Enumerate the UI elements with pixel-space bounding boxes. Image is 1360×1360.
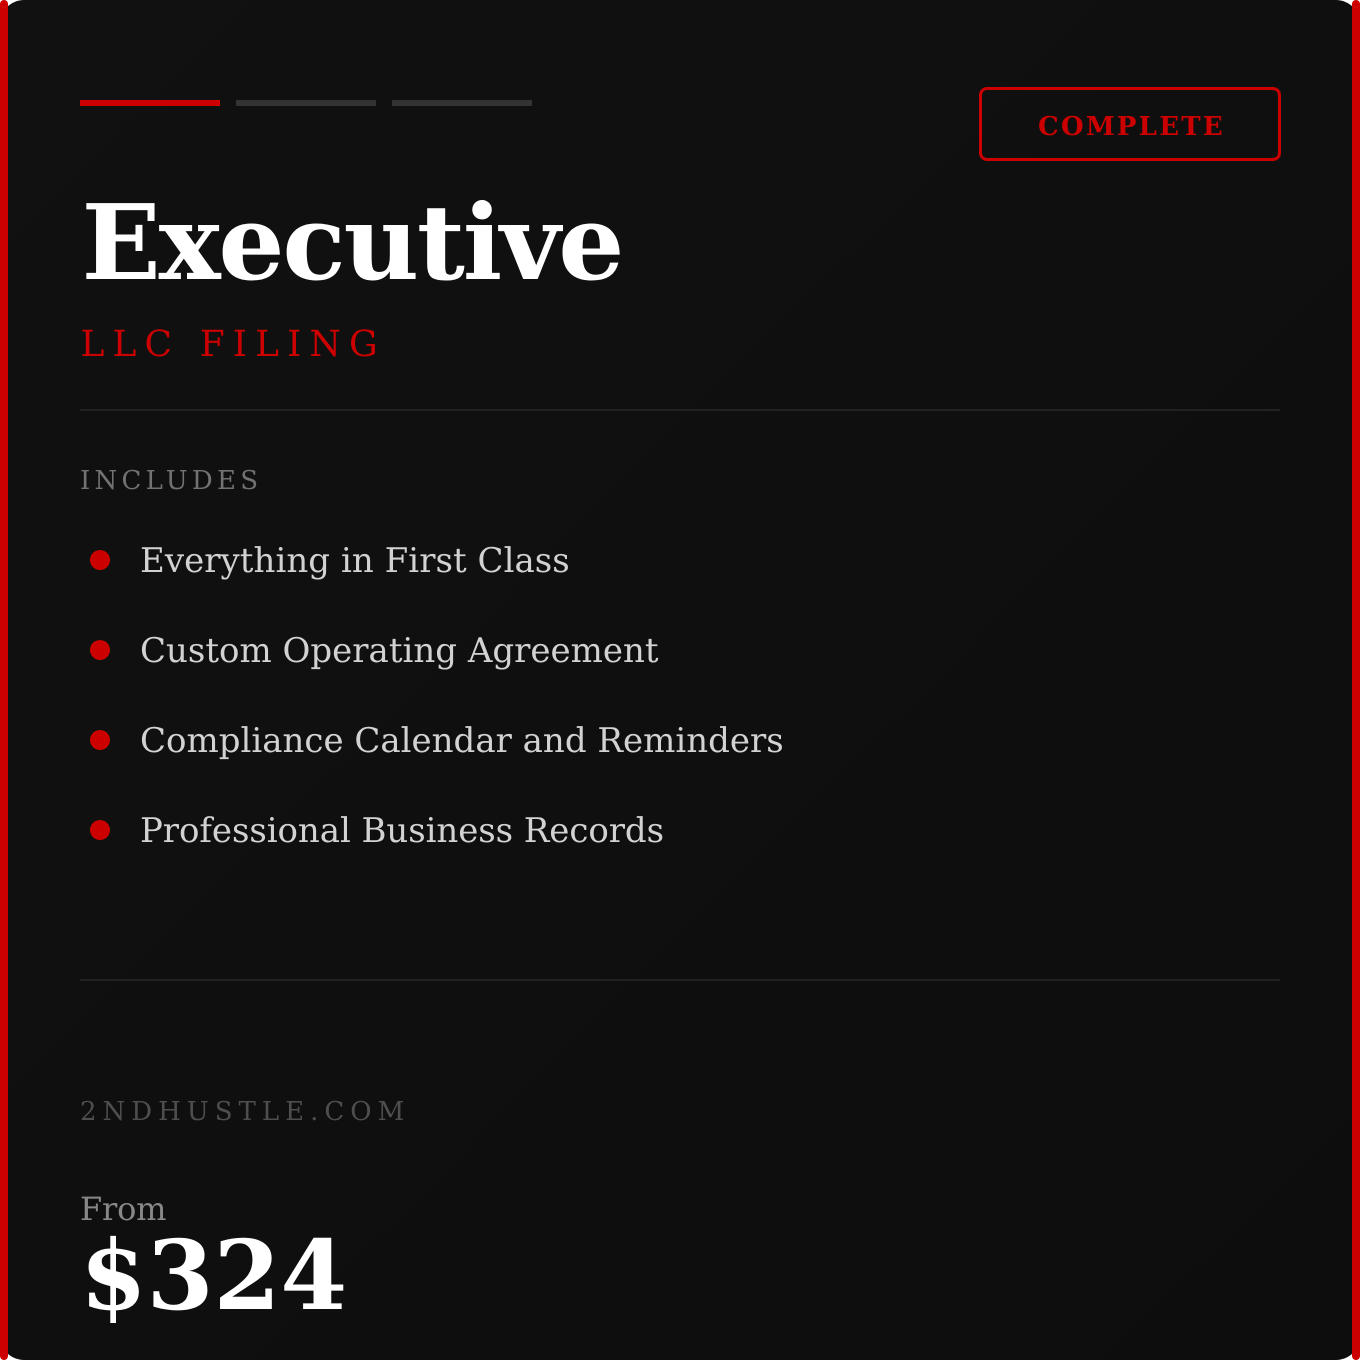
feature 3: Compliance Calendar and Reminders (140, 721, 784, 761)
price prefix: From (80, 1190, 166, 1228)
bullet 1 (90, 550, 110, 570)
feature 4: Professional Business Records (140, 811, 664, 851)
active segment (80, 100, 220, 106)
subtitle: LLC FILING (80, 324, 386, 365)
right accent bar (1352, 0, 1360, 1360)
feature 2: Custom Operating Agreement (140, 631, 659, 671)
includes heading: INCLUDES (80, 466, 262, 496)
feature list (90, 541, 784, 851)
website: 2NDHUSTLE.COM (80, 1097, 410, 1127)
inactive segment 2 (236, 100, 376, 106)
badge: complete (979, 87, 1281, 161)
inactive segment 3 (392, 100, 532, 106)
bullet 3 (90, 730, 110, 750)
badge label: COMPLETE (1038, 112, 1225, 142)
progress indicator (80, 100, 532, 106)
title: Executive (82, 181, 622, 304)
price: $324 (80, 1219, 347, 1332)
left accent bar (0, 0, 8, 1360)
feature 1: Everything in First Class (140, 541, 570, 581)
bullet 4 (90, 820, 110, 840)
bullet 2 (90, 640, 110, 660)
